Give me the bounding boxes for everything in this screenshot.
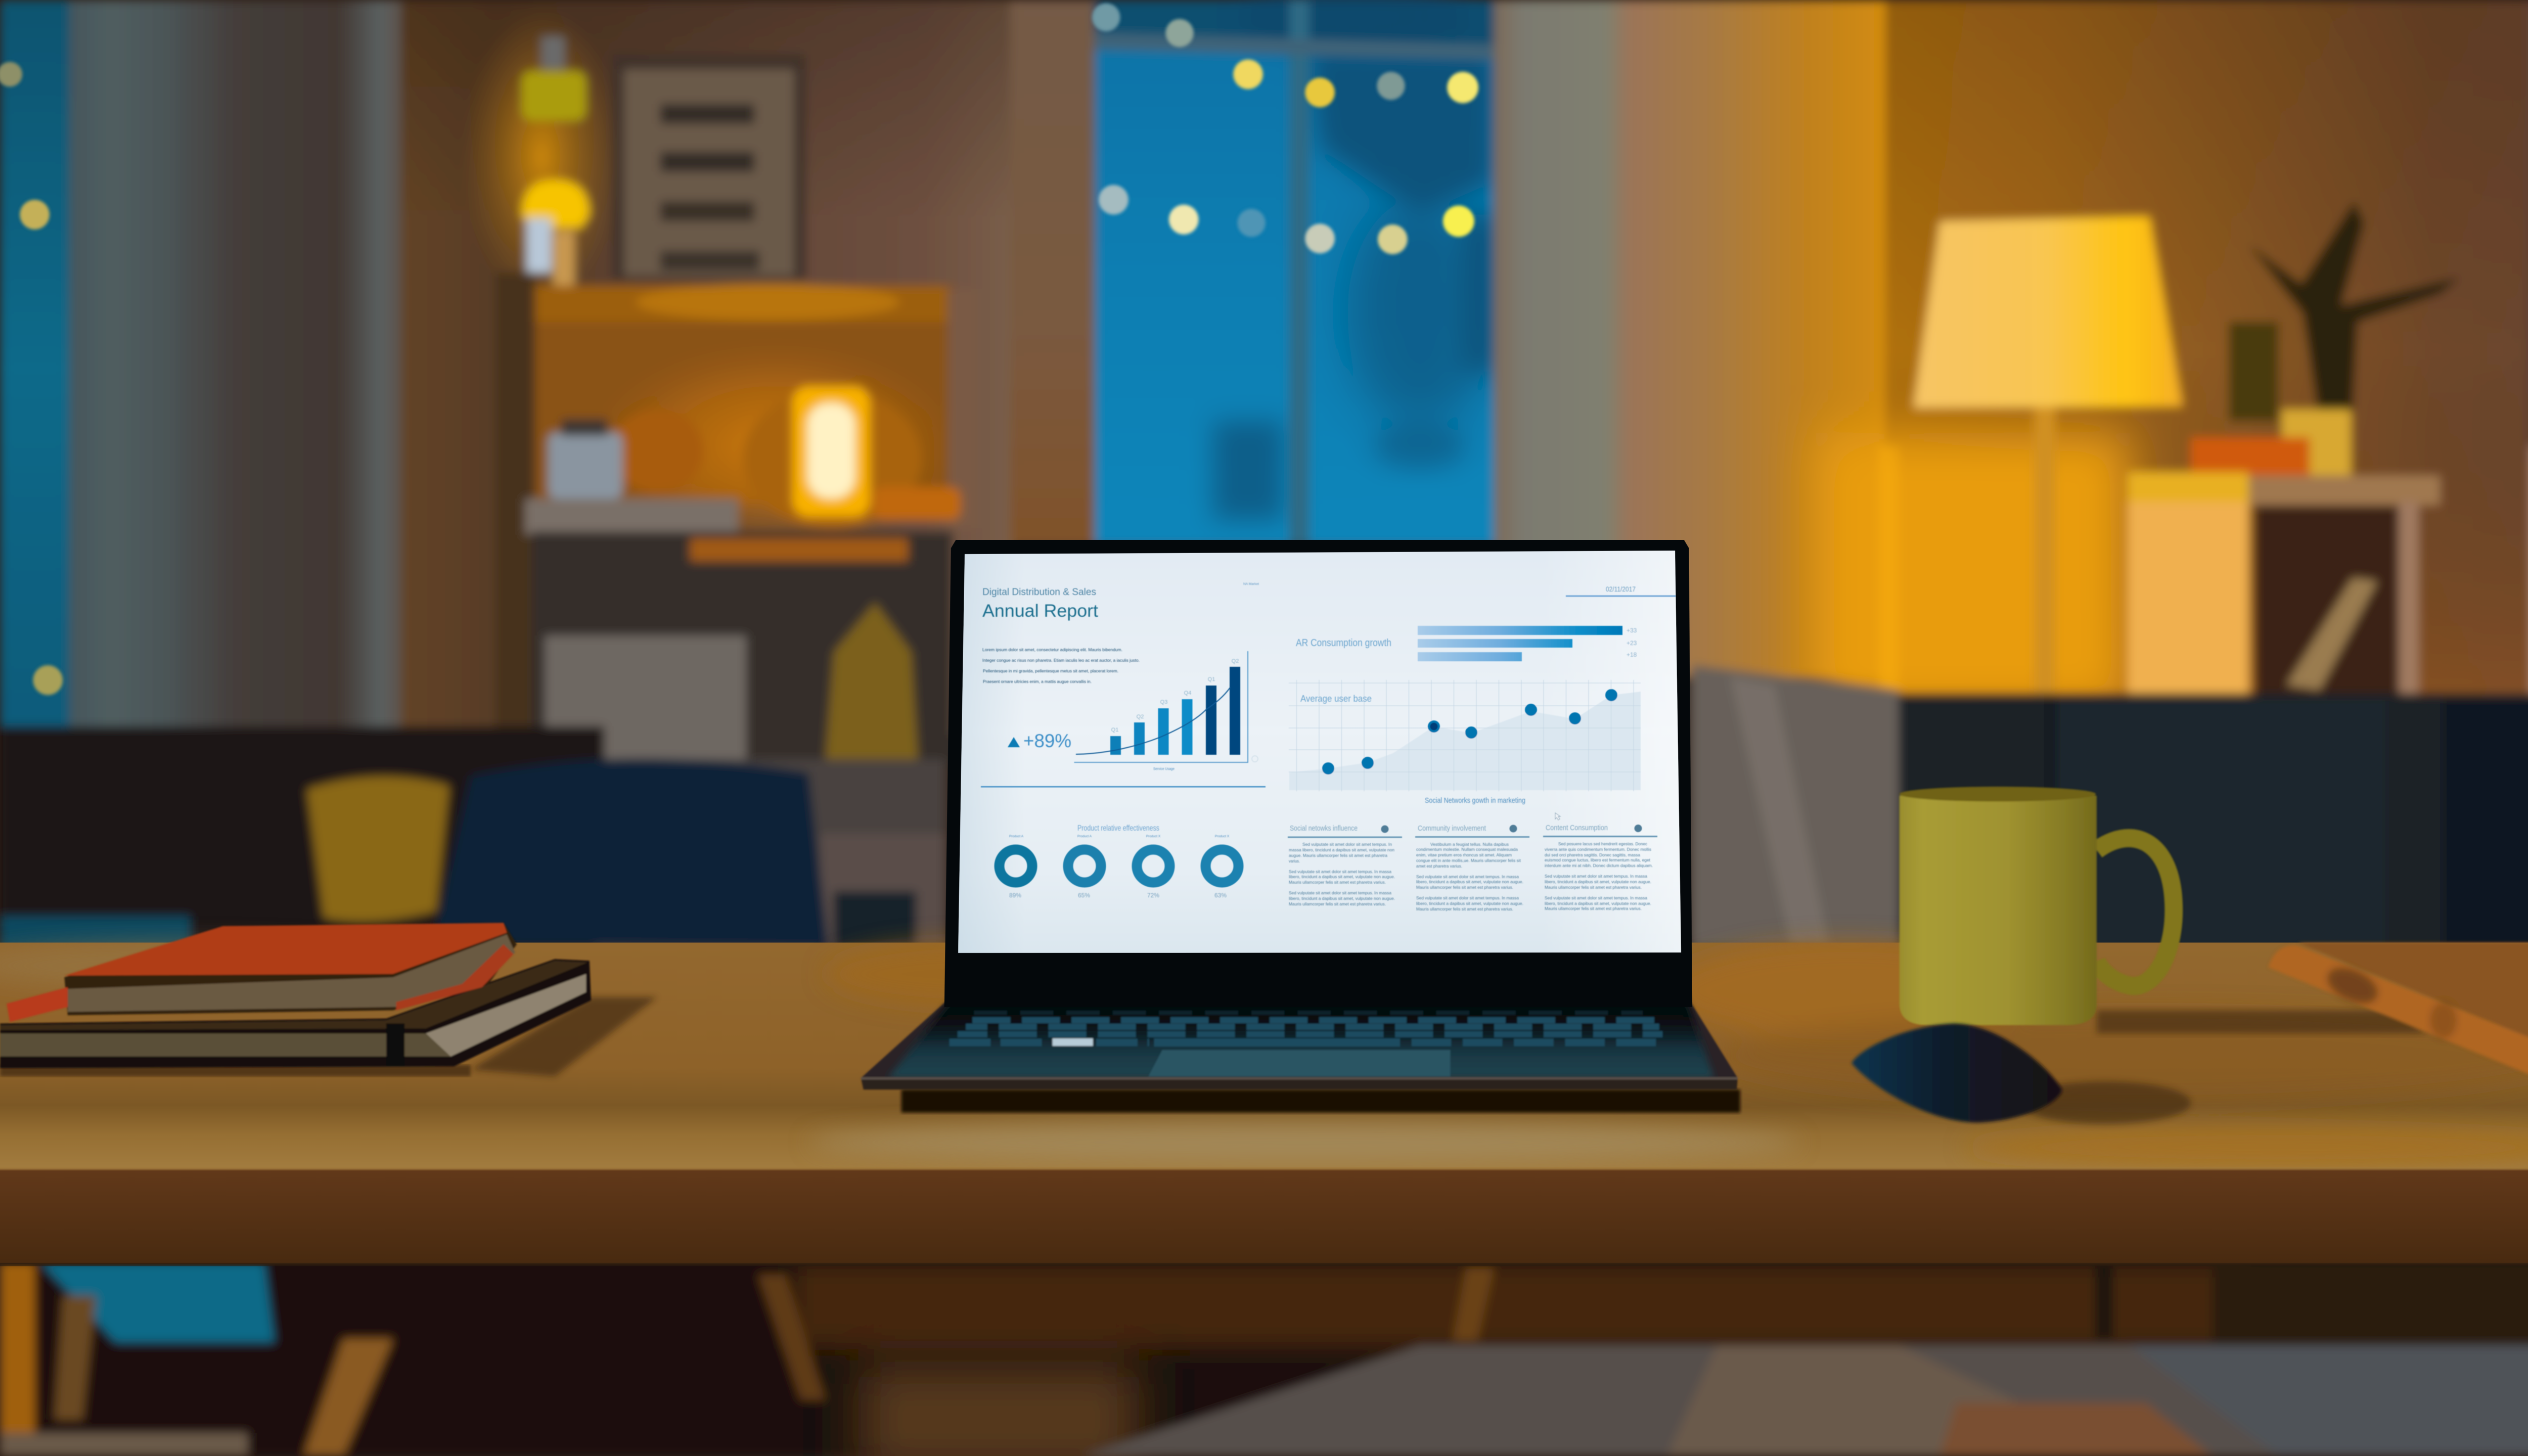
mug: [1900, 787, 2174, 1025]
stacked books: [0, 923, 591, 1068]
plant: [2191, 201, 2460, 480]
column: social networks influence: Social netowks influence: [1290, 824, 1358, 833]
left sofa and cushions: [0, 726, 944, 949]
column: social networks influence: Sed vulputate sit amet dolor sit amet tempus. In massa: [1289, 890, 1391, 895]
column chart: [1074, 651, 1258, 771]
column: content consumption: Sed posuere lacus sed hendrerit egestas. Donec: [1558, 841, 1648, 846]
wireless mouse: [1852, 1023, 2062, 1122]
column: community involvement: enim, vitae pretium eros rhoncus sit amet. Aliquam: [1416, 852, 1512, 857]
report header: 02/11/2017: [1606, 585, 1636, 593]
column: content consumption: libero, tincidunt a dapibus sit amet, vulputate non augue.: [1545, 901, 1651, 906]
column: social networks influence: augue. Mauris ullamcorper felis sit amet est pharetra: [1289, 853, 1387, 858]
column: content consumption: [1543, 824, 1657, 911]
column: content consumption: interdum ante mi at nibh. Donec dictum dapibus aliquam.: [1545, 863, 1653, 868]
floor lamp: [1913, 216, 2183, 698]
column: content consumption: viverra ante quis condimentum fermentum. Donec mollis: [1545, 847, 1651, 852]
red book: [7, 923, 517, 1022]
horizontal bars: AR Consumption growth: AR Consumption growth: [1296, 638, 1391, 649]
column: community involvement: Sed vulputate sit amet dolor sit amet tempus. In massa: [1416, 895, 1519, 900]
column: community involvement: Mauris ullamcorper felis sit amet est pharetra varius.: [1416, 885, 1513, 890]
column: content consumption: Mauris ullamcorper felis sit amet est pharetra varius.: [1545, 906, 1642, 911]
donut 63%: [1206, 850, 1239, 883]
side table and box: [2128, 446, 2528, 697]
column: content consumption: Sed vulputate sit amet dolor sit amet tempus. In massa: [1545, 874, 1647, 879]
donut 89%: [1000, 850, 1032, 883]
column chart: Q4: [1184, 690, 1191, 696]
column: content consumption: libero, tincidunt a dapibus sit amet, vulputate non augue.: [1545, 879, 1651, 884]
floor lamp glow: [1816, 433, 2130, 713]
laptop: [861, 540, 1738, 1089]
donut 65%: [1068, 850, 1101, 883]
column chart: Q3: [1160, 699, 1167, 705]
column chart: Q1: [1111, 727, 1118, 733]
donut charts: product relative effectiveness: 63%: [1214, 892, 1227, 899]
donut charts: product relative effectiveness: Product A: [1077, 835, 1092, 838]
right wall: [1885, 0, 2528, 702]
column: community involvement: libero, tincidunt a dapibus sit amet, vulputate non augue.: [1416, 879, 1523, 884]
horizontal bars: AR Consumption growth: [1296, 626, 1637, 661]
column: social networks influence: Mauris ullamcorper felis sit amet est pharetra varius.: [1289, 901, 1386, 906]
globe lamp: [743, 386, 921, 528]
donut charts: product relative effectiveness: 89%: [1009, 892, 1021, 899]
column: social networks influence: varius.: [1289, 858, 1300, 863]
wooden table: [0, 941, 2528, 1266]
column: community involvement: libero, tincidunt a dapibus sit amet, vulputate non augue.: [1416, 901, 1523, 906]
report header: Digital Distribution & Sales: [982, 587, 1096, 598]
screen dashboard: [951, 546, 1689, 956]
intro text: Pellentesque in mi gravida, pellentesque metus sit amet, placerat lorem.: [983, 668, 1118, 673]
left window: [0, 0, 73, 735]
glowing wall lamps: [462, 5, 621, 309]
report header: Annual Report: [982, 601, 1098, 621]
right sofa and blanket: [1692, 665, 2528, 949]
donut charts: product relative effectiveness: Product X: [1146, 835, 1161, 838]
column chart: Service Usage: [1153, 767, 1175, 771]
growth figure: +89%: [1023, 731, 1071, 751]
column: community involvement: Community involvement: [1418, 824, 1486, 833]
under-table area: [0, 1255, 2528, 1456]
column: social networks influence: [1288, 824, 1402, 906]
area chart: average user base: Social Networks gowth in marketing: [1425, 796, 1525, 805]
left curtain: [69, 0, 406, 735]
column: community involvement: Vestibulum a feugiat tellus. Nulla dapibus: [1430, 842, 1509, 847]
report header: NA Market: [1243, 582, 1259, 586]
trackpad: [1148, 1050, 1451, 1076]
bokeh lights: [0, 4, 1478, 695]
donut charts: product relative effectiveness: 65%: [1078, 892, 1090, 899]
column: community involvement: Sed vulputate sit amet dolor sit amet tempus. In massa: [1416, 874, 1519, 879]
column chart: Q1: [1208, 676, 1215, 682]
column: social networks influence: libero, tincidunt a dapibus sit amet, vulputate non augue.: [1289, 896, 1395, 901]
intro text: Integer congue ac risus non pharetra. Etiam iaculis leo ac erat auctor, a iaculis justo.: [982, 658, 1140, 663]
donut charts: product relative effectiveness: Product relative effectiveness: [1077, 824, 1159, 833]
column: social networks influence: Sed vulputate sit amet dolor sit amet tempus. In massa: [1289, 869, 1391, 874]
donut charts: product relative effectiveness: 72%: [1147, 892, 1159, 899]
laptop base: [861, 1002, 1738, 1089]
column: community involvement: condimentum molestie. Nullam consequat malesuada: [1416, 847, 1518, 852]
horizontal bars: AR Consumption growth: +18: [1627, 651, 1637, 658]
intro text: Lorem ipsum dolor sit amet, consectetur adipiscing elit. Mauris bibendum.: [982, 647, 1122, 652]
donut 72%: [1137, 850, 1170, 883]
donut charts: product relative effectiveness: Product X: [1215, 835, 1230, 838]
column: community involvement: Mauris ullamcorper felis sit amet est pharetra varius.: [1416, 906, 1513, 912]
bookshelf: [495, 272, 977, 781]
keyboard: [950, 1013, 1667, 1046]
column: content consumption: dui sed orci pharetra sagittis. Donec sagittis, massa: [1545, 852, 1640, 857]
column: social networks influence: Mauris ullamcorper felis sit amet est pharetra varius.: [1289, 880, 1386, 885]
column: content consumption: Mauris ullamcorper felis sit amet est pharetra varius.: [1545, 885, 1642, 890]
shadows on table: [0, 997, 2427, 1124]
main window: [1010, 0, 1498, 545]
laptop lid: [944, 540, 1692, 1007]
column: community involvement: [1415, 824, 1529, 912]
donut charts: product relative effectiveness: Product A: [1009, 835, 1024, 838]
black book: [0, 959, 591, 1068]
area chart: average user base: Average user base: [1300, 694, 1372, 704]
intro text: [982, 647, 1140, 684]
report header: [982, 582, 1677, 621]
horizontal bars: AR Consumption growth: +33: [1627, 627, 1637, 634]
column: content consumption: Content Consumption: [1546, 824, 1608, 832]
mouse cursor: [1555, 813, 1560, 820]
rolled notebook: [2269, 942, 2528, 1096]
column: social networks influence: libero, tincidunt a dapibus sit amet, vulputate non augue.: [1289, 874, 1395, 879]
column: content consumption: Sed vulputate sit amet dolor sit amet tempus. In massa: [1545, 895, 1647, 900]
column: social networks influence: Sed vulputate sit amet dolor sit amet tempus. In: [1302, 842, 1392, 847]
horizontal bars: AR Consumption growth: +23: [1627, 640, 1637, 647]
column: community involvement: congue elit in ante mollis,ue. Mauris ullamcorper felis sit: [1416, 858, 1521, 863]
column chart: Q2: [1232, 658, 1239, 664]
intro text: Praesent ornare ultricies enim, a mattis augue convallis in.: [983, 679, 1092, 684]
area chart: average user base: [1289, 680, 1641, 805]
column chart: Q2: [1137, 714, 1144, 720]
column: social networks influence: massa libero, tincidunt a dapibus sit amet, vulputate non: [1289, 847, 1394, 852]
column: content consumption: euismod congue luctus, libero est fermentum nulla, eget: [1545, 857, 1651, 862]
back wall, centre: [401, 0, 1015, 735]
rug: [0, 1345, 2528, 1456]
donut charts: product relative effectiveness: [1000, 824, 1239, 899]
right curtain: [1494, 0, 1893, 677]
column: community involvement: amet est pharetra varius.: [1416, 863, 1462, 869]
picture frame: [612, 55, 805, 279]
